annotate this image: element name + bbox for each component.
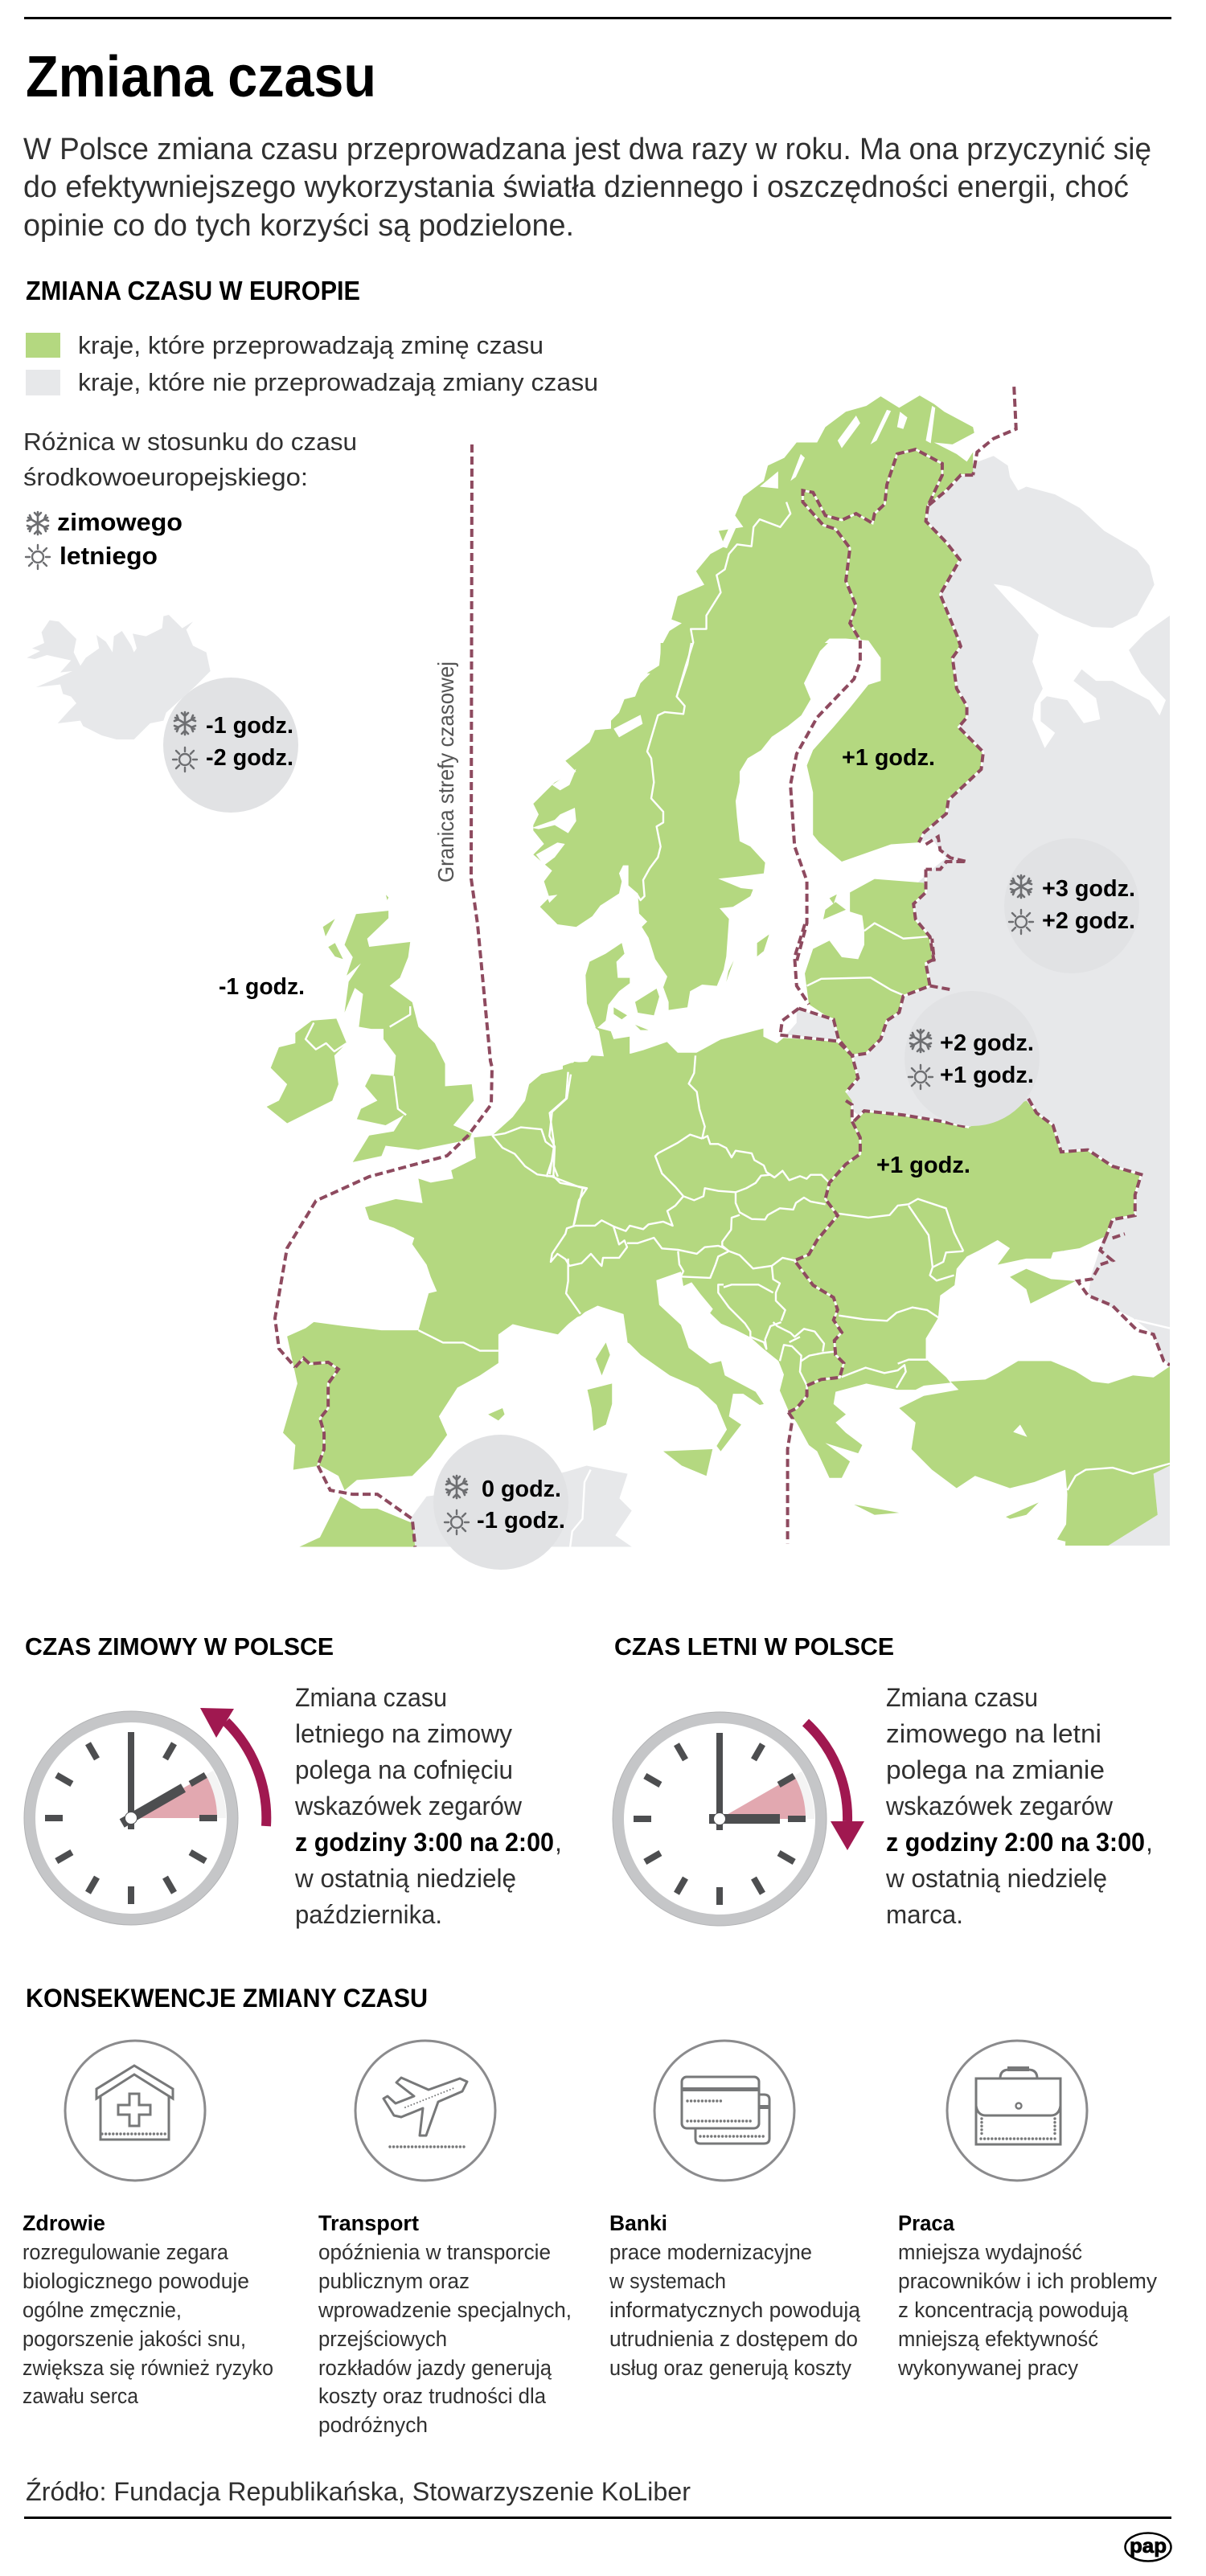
title: Zmiana czasu — [26, 45, 376, 109]
text: winter time change: polega na cofnięciu — [295, 1755, 513, 1784]
badge: Belarus: +1 godz. — [940, 1063, 1034, 1088]
heading: Europe: ZMIANA CZASU W EUROPIE — [26, 276, 360, 305]
text block: transport: Transport — [318, 2211, 419, 2235]
northern fjords — [720, 406, 935, 548]
intro text: opinie co do tych korzyści są podzielone. — [23, 209, 574, 243]
intro text: W Polsce zmiana czasu przeprowadzana jest dwa razy w roku. Ma ona przyczynić się — [23, 133, 1151, 166]
text: summer time change: zimowego na letni — [886, 1719, 1101, 1748]
text block: health: ogólne zmęcznie, — [23, 2298, 182, 2322]
text block: health: pogorszenie jakości snu, — [23, 2327, 246, 2351]
time zone boundary — [275, 387, 1170, 1546]
Gotland and Oland — [726, 935, 769, 982]
legend swatch: gray — [26, 370, 60, 395]
badge: Algeria: -1 godz. — [477, 1508, 565, 1534]
icon: bank cards — [654, 2041, 794, 2181]
bottom rule — [24, 2517, 1171, 2519]
icon: hospital — [65, 2041, 205, 2181]
text: winter time change: Zmiana czasu — [295, 1683, 447, 1712]
text block: banks: w systemach — [609, 2269, 726, 2293]
Turkey and Syria — [899, 1361, 1170, 1546]
text block: transport: opóźnienia w transporcie — [318, 2240, 551, 2264]
text block: transport: wprowadzenie specjalnych, — [318, 2298, 572, 2322]
text block: transport: publicznym oraz — [318, 2269, 470, 2293]
text: winter time change: w ostatnią niedzielę — [294, 1864, 516, 1893]
badge: Iceland: -1 godz. — [206, 713, 293, 739]
Gulf of Finland — [918, 839, 946, 875]
clock: summer — [613, 1712, 827, 1926]
badge: Russia — [1004, 838, 1139, 973]
text: winter time change: , — [555, 1828, 562, 1857]
icon: snowflake — [27, 512, 48, 534]
text: summer time change: w ostatnią niedzielę — [885, 1864, 1107, 1893]
intro text — [23, 133, 1151, 243]
badge: Russia: +2 godz. — [1042, 908, 1135, 934]
top rule — [24, 17, 1171, 19]
text: winter time change — [294, 1683, 562, 1929]
badge: Russia: +3 godz. — [1042, 876, 1135, 902]
text: summer time change: z godziny 2:00 na 3:00 — [886, 1828, 1145, 1857]
heading: summer time: CZAS LETNI W POLSCE — [614, 1632, 894, 1661]
text: summer time change: wskazówek zegarów — [885, 1792, 1114, 1820]
text block: transport — [318, 2211, 572, 2437]
Ireland — [267, 1018, 347, 1123]
text block: banks: informatycznych powodują — [609, 2298, 861, 2322]
intro text: do efektywniejszego wykorzystania światła dziennego i oszczędności energii, choć — [23, 170, 1129, 204]
text block: banks: prace modernizacyjne — [609, 2240, 812, 2264]
Norway, northern Sweden, Finland — [647, 395, 983, 862]
badge: Iceland: -2 godz. — [206, 745, 293, 771]
text block: banks: Banki — [609, 2211, 667, 2235]
text: summer time change: Zmiana czasu — [886, 1683, 1038, 1712]
difference note: środkowoeuropejskiego: — [23, 463, 308, 491]
difference note — [23, 428, 357, 570]
text block: banks: usług oraz generują koszty — [609, 2356, 851, 2380]
legend swatch: green — [26, 333, 60, 358]
map of Europe — [27, 387, 1170, 1546]
arrow: back one hour — [200, 1708, 266, 1826]
text block: work: wykonywanej pracy — [897, 2356, 1078, 2380]
heading: consequences: KONSEKWENCJE ZMIANY CZASU — [26, 1984, 428, 2013]
legend: kraje, które nie przeprowadzają zmiany czasu — [78, 368, 598, 396]
label: Finland time difference: +1 godz. — [842, 745, 935, 771]
Central and Eastern Europe — [563, 1027, 1141, 1478]
text: summer time change — [885, 1683, 1153, 1929]
badge: Iceland — [163, 678, 298, 813]
Mediterranean islands, Crimea, North Africa green — [299, 1269, 1076, 1546]
text: winter time change: z godziny 3:00 na 2:00 — [295, 1828, 554, 1857]
text: summer time change: polega na zmianie — [886, 1755, 1105, 1784]
text block: work: Praca — [898, 2211, 955, 2235]
Turkish lake — [1013, 1424, 1028, 1437]
text block: work: z koncentracją powodują — [898, 2298, 1129, 2322]
text block: banks: utrudnienia z dostępem do — [609, 2327, 858, 2351]
badge: Algeria — [433, 1435, 568, 1570]
logo: pap: pap — [1130, 2535, 1167, 2558]
text block: work: mniejszą efektywność — [898, 2327, 1098, 2351]
text block: transport: rozkładów jazdy generują — [318, 2356, 552, 2380]
text: summer time change: marca. — [886, 1900, 963, 1929]
difference note: letniego — [59, 542, 158, 570]
text block: transport: przejściowych — [318, 2327, 447, 2351]
icon: airplane — [355, 2041, 495, 2181]
Great Britain — [345, 911, 474, 1162]
text block: transport: koszty oraz trudności dla — [318, 2384, 547, 2408]
text: winter time change: wskazówek zegarów — [294, 1792, 523, 1820]
arrow: forward one hour — [806, 1722, 864, 1850]
text block: transport: podróżnych — [318, 2413, 428, 2437]
text block: health: Zdrowie — [23, 2211, 105, 2235]
France, Iberia, Benelux, western Germany — [283, 1054, 643, 1490]
label: UK time difference: -1 godz. — [219, 974, 305, 1000]
legend: kraje, które przeprowadzają zminę czasu — [78, 331, 544, 359]
text block: work: mniejsza wydajność — [898, 2240, 1082, 2264]
text block: work — [897, 2211, 1157, 2380]
text: summer time change: , — [1146, 1828, 1153, 1857]
label: Ukraine time difference: +1 godz. — [876, 1153, 970, 1178]
badge: Belarus: +2 godz. — [940, 1030, 1034, 1056]
text block: health: rozregulowanie zegara — [23, 2240, 229, 2264]
label: time zone border: Granica strefy czasowej — [433, 661, 458, 883]
text block: health — [23, 2211, 273, 2408]
legend — [26, 331, 598, 396]
logo: pap — [1126, 2533, 1171, 2561]
icon: sun — [26, 545, 50, 569]
country borders — [306, 502, 1170, 1546]
Russia and eastern neighbours — [785, 456, 1170, 1546]
white underlay of time-zone borders — [295, 449, 1141, 1465]
clock: winter — [24, 1711, 238, 1925]
Baltic states — [805, 879, 934, 1055]
southern Norway and Sweden — [533, 643, 828, 1010]
text block: banks — [609, 2211, 861, 2380]
text: winter time change: letniego na zimowy — [295, 1719, 512, 1748]
icon: briefcase — [947, 2041, 1087, 2181]
southern fjords — [532, 715, 642, 903]
Denmark — [585, 943, 659, 1030]
North Africa, gray part — [410, 1465, 632, 1546]
text block: health: zwiększa się również ryzyko — [23, 2356, 273, 2380]
text block: work: pracowników i ich problemy — [898, 2269, 1157, 2293]
badge: Algeria: 0 godz. — [482, 1476, 561, 1502]
White Sea — [994, 584, 1170, 747]
difference note: Różnica w stosunku do czasu — [23, 428, 357, 456]
source: Źródło: Fundacja Republikańska, Stowarzyszenie KoLiber — [26, 2477, 691, 2506]
Scottish islands — [323, 895, 388, 959]
Iceland — [27, 615, 211, 739]
heading: winter time: CZAS ZIMOWY W POLSCE — [25, 1632, 334, 1661]
badge: Belarus — [904, 991, 1040, 1126]
difference note: zimowego — [57, 508, 183, 536]
text block: health: biologicznego powoduje — [23, 2269, 249, 2293]
Black Sea and Azov — [1055, 1238, 1170, 1371]
text: winter time change: października. — [295, 1900, 442, 1929]
text block: health: zawału serca — [23, 2384, 139, 2408]
